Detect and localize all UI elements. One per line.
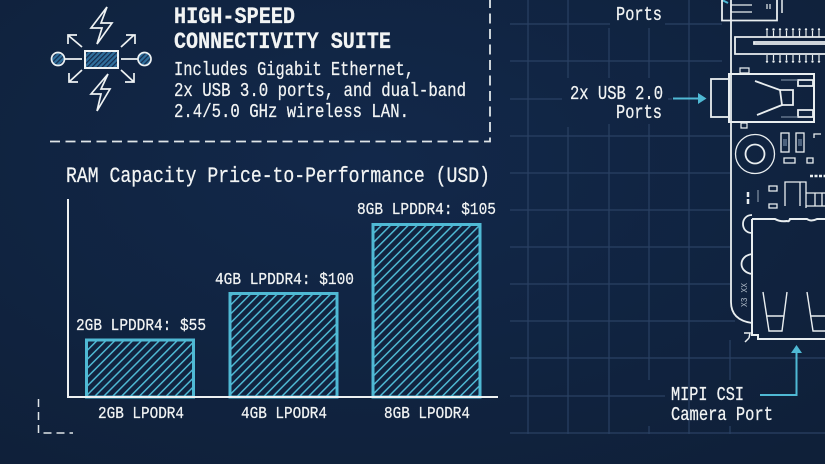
board schematic (711, 0, 825, 342)
text block: connectivity description: Includes Gigabit Ethernet, (174, 59, 414, 81)
bar: 2GB: 2GB LPDDR4: $55 (76, 316, 206, 335)
label: USB 2.0 ports (570, 83, 706, 124)
label: USB 3.0 ports (616, 0, 728, 26)
text block: connectivity description (174, 59, 466, 123)
heading: high-speed connectivity suite: HIGH-SPEED (174, 4, 295, 30)
label: MIPI CSI camera port: MIPI CSI (671, 384, 744, 406)
label: USB 2.0 ports: 2x USB 2.0 (570, 83, 663, 105)
text block: connectivity description: 2.4/5.0 GHz wireless LAN. (174, 101, 409, 123)
label: MIPI CSI camera port: Camera Port (671, 404, 773, 426)
icon: connectivity chip (52, 7, 151, 111)
board silk text: X3 XX (740, 282, 750, 307)
small components (748, 133, 825, 208)
label: MIPI CSI camera port (671, 345, 802, 426)
connectivity suite panel (50, 0, 490, 142)
round mounting hole (736, 134, 774, 174)
arrow: camera port (760, 345, 802, 395)
USB slot sketches (763, 292, 825, 331)
USB 2.0 connector drawing (711, 68, 814, 128)
bar: 8GB (357, 200, 496, 423)
text block: connectivity description: 2x USB 3.0 ports, and dual-band (174, 80, 466, 102)
bar: 4GB: 4GB LPDDR4: $100 (215, 270, 354, 289)
label: USB 3.0 ports: Ports (616, 4, 662, 26)
board outline (731, 0, 752, 323)
bar: 8GB: 8GB LPODR4 (384, 404, 470, 423)
bar: 4GB (215, 270, 354, 423)
heading: high-speed connectivity suite (174, 4, 391, 55)
bar chart: RAM price (68, 199, 498, 423)
bar: 8GB: 8GB LPDDR4: $105 (357, 200, 496, 219)
GPIO header (735, 30, 825, 62)
label: USB 2.0 ports: Ports (616, 102, 662, 124)
heading: chart title: RAM Capacity Price-to-Performance (USD) (66, 164, 490, 189)
panel border: dashed (50, 0, 490, 142)
top USB connector (722, 0, 782, 20)
arrow: USB 2.0 (673, 93, 706, 104)
bar: 2GB (76, 316, 206, 423)
bar: 4GB: 4GB LPODR4 (241, 404, 327, 423)
bar: 2GB: 2GB LPODR4 (98, 404, 184, 423)
large USB/Ethernet connector block (742, 215, 825, 342)
heading: high-speed connectivity suite: CONNECTIVITY SUITE (174, 29, 391, 55)
chart axes (68, 199, 498, 397)
